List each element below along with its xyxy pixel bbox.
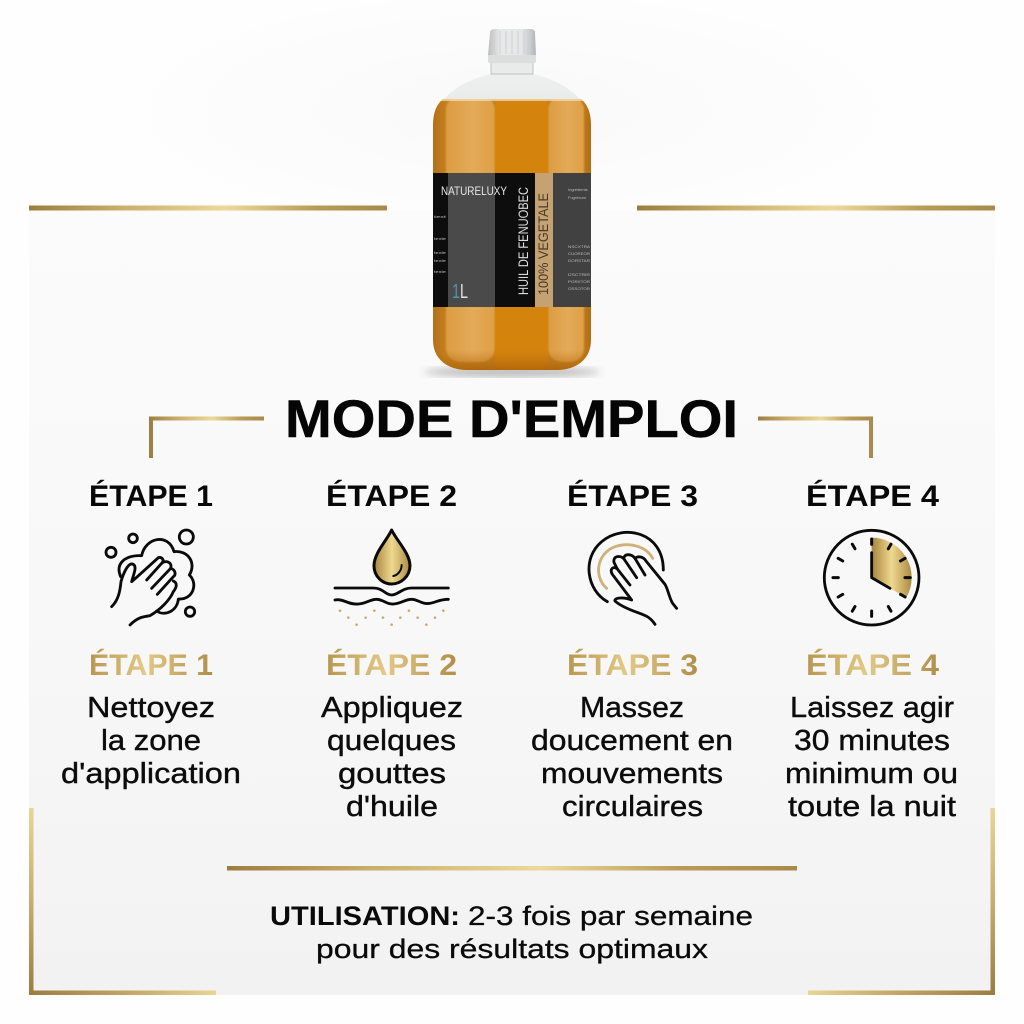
- bottom-right gold corner: [808, 808, 995, 995]
- product bottle: texte: [434, 269, 447, 274]
- step 2 gold label: ÉTAPE 2: [326, 648, 457, 682]
- icon: washing hand with foam: [106, 530, 195, 625]
- step 1 description: la zone: [101, 725, 201, 757]
- product bottle: DORSTAR: [568, 258, 590, 263]
- icon: clock: [824, 530, 919, 625]
- step 1 column: [61, 479, 241, 790]
- step 2 description: gouttes: [338, 758, 446, 790]
- top background glow: [92, 0, 932, 240]
- step 4 column: [785, 479, 958, 823]
- step 4 description: toute la nuit: [788, 791, 956, 823]
- product bottle: Fugrécum: [568, 195, 587, 200]
- top gold rule left: [29, 206, 387, 210]
- step 2 heading: ÉTAPE 2: [326, 479, 457, 513]
- product bottle: texte: [434, 236, 447, 241]
- product bottle: NATURELUXY: [441, 186, 507, 198]
- step 3 heading: ÉTAPE 3: [567, 479, 698, 513]
- icon: oil drop on skin: [335, 530, 448, 626]
- step 1 description: [61, 692, 241, 790]
- usage note: [270, 901, 753, 964]
- product bottle: NSCXTRA: [568, 244, 590, 249]
- product bottle: CUOREOR: [568, 251, 590, 256]
- step 2 description: Appliquez: [321, 692, 463, 724]
- product bottle: text: [434, 214, 448, 219]
- step 2 column: [321, 479, 463, 823]
- step 1 description: d'application: [61, 758, 241, 790]
- step 4 description: 30 minutes: [794, 725, 950, 757]
- usage note: pour des résultats optimaux: [316, 934, 709, 964]
- step 4 heading: ÉTAPE 4: [806, 479, 939, 513]
- gold divider: [227, 866, 797, 870]
- product bottle: Ingrédients: [568, 187, 588, 192]
- product bottle: 1L: [452, 281, 468, 303]
- product bottle: 100% VEGETALE: [535, 193, 551, 295]
- step 4 gold label: ÉTAPE 4: [806, 648, 939, 682]
- bottom-left gold corner: [29, 808, 216, 995]
- usage note: 2-3 fois par semaine: [468, 901, 753, 931]
- step 3 description: [531, 692, 733, 823]
- step 2 description: quelques: [327, 725, 456, 757]
- step 3 description: Massez: [580, 692, 684, 724]
- background panel: [29, 210, 995, 995]
- product bottle: OSSOTOR: [568, 286, 590, 291]
- product bottle: DSCTRIR: [568, 272, 590, 277]
- top gold rule right: [637, 206, 995, 210]
- step 2 description: d'huile: [346, 791, 438, 823]
- title: MODE D'EMPLOI: [285, 390, 738, 449]
- icon: massaging hand: [589, 532, 677, 624]
- product bottle: texte: [434, 258, 447, 263]
- step 3 gold label: ÉTAPE 3: [567, 648, 698, 682]
- usage note: UTILISATION:: [270, 901, 460, 931]
- step 4 description: Laissez agir: [790, 692, 954, 724]
- title bracket right: [758, 416, 873, 458]
- step 1 description: Nettoyez: [87, 692, 215, 724]
- step 1 gold label: ÉTAPE 1: [89, 648, 213, 682]
- step 3 description: circulaires: [562, 791, 703, 823]
- product bottle: [424, 29, 600, 377]
- product bottle: texte: [434, 250, 447, 255]
- step 4 description: minimum ou: [785, 758, 958, 790]
- step 3 column: [531, 479, 733, 823]
- step 1 heading: ÉTAPE 1: [89, 479, 213, 513]
- step 3 description: mouvements: [541, 758, 723, 790]
- title bracket left: [149, 416, 264, 458]
- step 4 description: [785, 692, 958, 823]
- product bottle: HUIL DE FENUOBEC: [516, 187, 531, 295]
- step 3 description: doucement en: [531, 725, 733, 757]
- step 2 description: [321, 692, 463, 823]
- product bottle: PORXTOR: [568, 279, 590, 284]
